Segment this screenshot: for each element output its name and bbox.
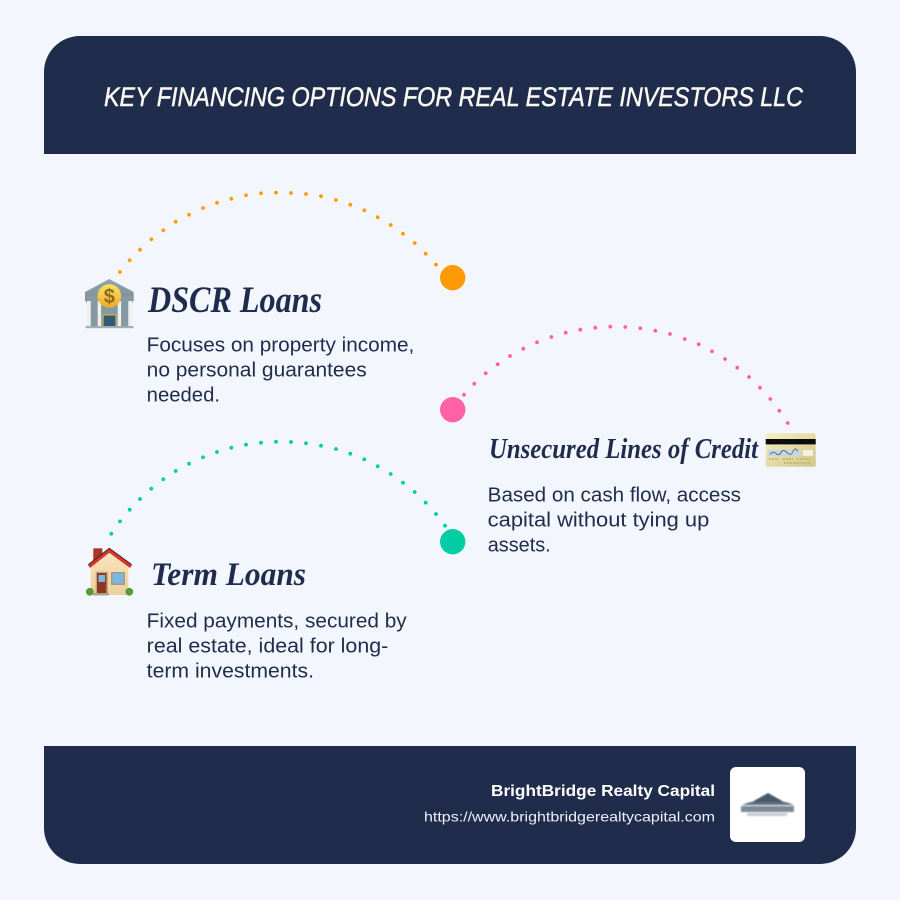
dotted arc: pink [462,325,790,425]
marker: orange circle [440,265,465,290]
marker: pink circle [440,397,465,422]
icon: house [86,548,133,596]
panel: header [44,36,856,154]
text: term description: Fixed payments, secured by [147,611,407,633]
text: DSCR description [147,335,414,407]
icon: credit card [766,433,816,467]
marker: green circle [440,529,465,554]
heading: DSCR Loans: DSCR Loans [147,280,322,321]
text: credit description [488,485,741,557]
panel: unsecured lines of credit [488,433,816,557]
text: credit description: Based on cash flow, access [488,485,741,507]
text: DSCR description: Focuses on property income, [147,335,414,357]
text: credit description: capital without tying up [488,510,709,532]
website url: https://www.brightbridgerealtycapital.com [424,809,715,825]
icon: bank with dollar coin [85,279,134,328]
panel: DSCR loans [85,279,414,407]
icon: bank with dollar coin: $ [104,286,115,308]
text: term description [147,611,407,683]
heading: Unsecured Lines of Credit: Unsecured Lines of Credit [489,434,759,465]
text: term description: real estate, ideal for long- [147,636,388,658]
text: DSCR description: no personal guarantees [147,360,367,382]
heading: Term Loans: Term Loans [151,557,306,593]
text: DSCR description: needed. [147,385,220,407]
text: credit description: assets. [488,535,551,557]
title: KEY FINANCING OPTIONS FOR REAL ESTATE INVESTORS LLC [104,82,803,112]
panel: footer [44,746,856,864]
brand name: BrightBridge Realty Capital [491,783,715,800]
logo [730,767,805,842]
dotted arc: green [109,440,447,536]
panel: term loans [86,548,407,683]
text: term description: term investments. [147,661,314,683]
dotted arc: orange [118,191,438,274]
